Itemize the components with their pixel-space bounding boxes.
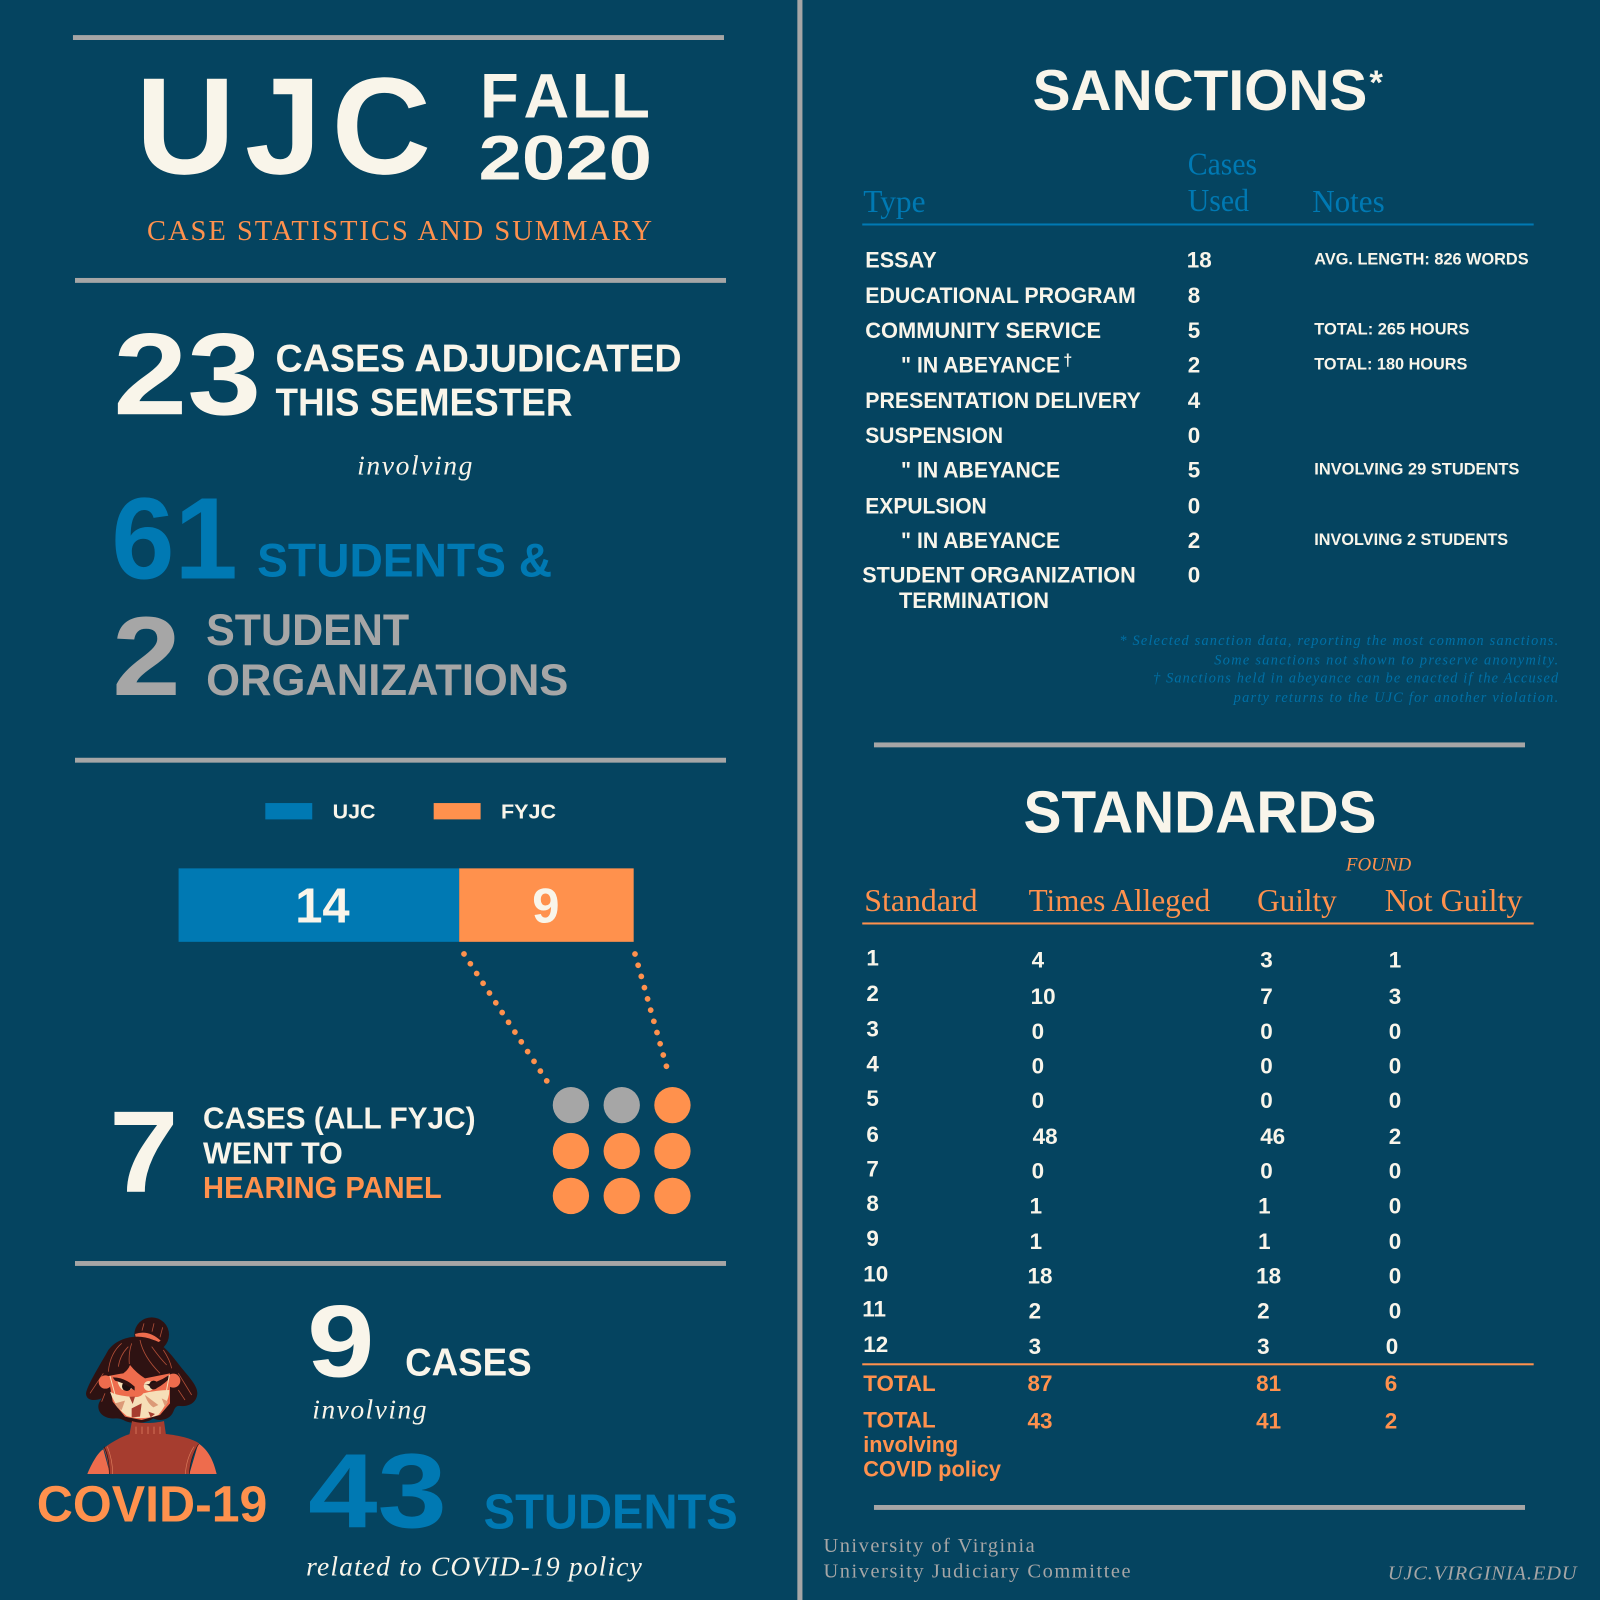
- stat: 23 cases adjudicated: THIS SEMESTER: [276, 381, 572, 424]
- standards totals: TOTAL: [863, 1408, 936, 1433]
- stat: 7 cases hearing panel: CASES (ALL FYJC): [203, 1102, 476, 1136]
- stat: 2 student organizations: 2: [112, 593, 181, 719]
- icon: masked woman: [86, 1317, 217, 1474]
- stat: 9 cases: CASES: [405, 1342, 532, 1385]
- standards table rows: 0: [1389, 1053, 1401, 1078]
- stat: 61 students: 61: [111, 474, 238, 604]
- standards table rows: 48: [1033, 1124, 1058, 1149]
- sanctions table rows: TOTAL: 265 HOURS: [1314, 320, 1469, 339]
- stat: 23 cases adjudicated: CASES ADJUDICATED: [276, 337, 682, 380]
- stacked bar chart: 9: [532, 879, 560, 933]
- stat: 43 students: [308, 1433, 738, 1551]
- standards table rows: 12: [863, 1332, 888, 1357]
- label: COVID-19: COVID-19: [37, 1475, 267, 1532]
- standards table rows: 0: [1032, 1053, 1044, 1078]
- footer: [823, 1535, 1578, 1585]
- standards table rows: 0: [1389, 1229, 1401, 1254]
- dotted connector lines: [464, 954, 666, 1081]
- stat: 9 cases: [307, 1285, 532, 1399]
- sanctions table rows: EDUCATIONAL PROGRAM: [865, 283, 1136, 308]
- standards table rows: 3: [1257, 1334, 1270, 1359]
- standards table rows: 2: [1257, 1298, 1270, 1323]
- standards table rows: 0: [1260, 1053, 1273, 1078]
- stat: 43 students: 43: [308, 1433, 447, 1551]
- footnotes: party returns to the UJC for another violation.: [1233, 690, 1558, 706]
- standards table rows: 18: [1028, 1264, 1053, 1289]
- title: UJC Fall 2020: 2020: [479, 124, 652, 194]
- sanctions table rows: ESSAY: [865, 247, 937, 272]
- text: related to covid policy: related to COVID-19 policy: [306, 1551, 643, 1582]
- sanctions table rows: [862, 247, 1529, 613]
- standards table rows: 0: [1260, 1019, 1273, 1044]
- sanctions table rows: †: [1063, 351, 1072, 369]
- sanctions table rows: " IN ABEYANCE: [901, 352, 1060, 377]
- sanctions table header: Notes: [1312, 184, 1385, 219]
- standards totals: COVID policy: [863, 1457, 1002, 1482]
- standards table header: Standard: [864, 883, 978, 918]
- sanctions table rows: 0: [1188, 563, 1200, 588]
- sanctions table rows: INVOLVING 2 STUDENTS: [1314, 530, 1508, 549]
- standards table rows: 0: [1389, 1193, 1401, 1218]
- stacked bar chart: 14: [295, 879, 350, 933]
- footer: University Judiciary Committee: [823, 1561, 1131, 1583]
- standards table rows: 7: [866, 1157, 879, 1182]
- footnotes: Some sanctions not shown to preserve anonymity.: [1214, 652, 1558, 668]
- stat: 23 cases adjudicated: 23: [113, 309, 261, 439]
- sanctions table rows: TOTAL: 180 HOURS: [1314, 354, 1467, 373]
- stat: 2 student organizations: ORGANIZATIONS: [206, 654, 568, 705]
- sanctions table rows: SUSPENSION: [865, 423, 1003, 448]
- standards table rows: 0: [1032, 1088, 1044, 1113]
- sanctions table rows: 0: [1188, 423, 1200, 448]
- sanctions table rows: " IN ABEYANCE: [901, 458, 1060, 483]
- standards table rows: 3: [1029, 1334, 1041, 1359]
- stat: 7 cases hearing panel: [109, 1087, 476, 1217]
- legend: FYJC: [501, 801, 556, 823]
- standards table header: Times Alleged: [1029, 883, 1210, 918]
- sanctions table rows: 0: [1188, 493, 1200, 518]
- standards table rows: 7: [1260, 984, 1273, 1009]
- sanctions table rows: 8: [1188, 283, 1200, 308]
- sanctions table header: Used: [1188, 183, 1249, 218]
- standards table header: Guilty: [1257, 883, 1337, 918]
- standards table rows: 3: [866, 1017, 879, 1042]
- standards table rows: 0: [1389, 1159, 1401, 1184]
- stat: 7 cases hearing panel: 7: [109, 1087, 179, 1217]
- standards table rows: 1: [1389, 947, 1401, 972]
- standards table rows: 9: [866, 1226, 879, 1251]
- sanctions table rows: 5: [1188, 458, 1200, 483]
- sanctions table rows: 5: [1188, 318, 1200, 343]
- standards table rows: 0: [1032, 1159, 1044, 1184]
- footer: UJC.VIRGINIA.EDU: [1388, 1563, 1578, 1585]
- title: UJC Fall 2020: UJC: [136, 49, 431, 203]
- standards table rows: 1: [1030, 1229, 1042, 1254]
- standards table rows: 0: [1386, 1334, 1398, 1359]
- stat: 61 students: STUDENTS &: [257, 535, 552, 587]
- standards totals: TOTAL: [863, 1371, 936, 1396]
- standards table rows: 0: [1032, 1019, 1044, 1044]
- sanctions table rows: AVG. LENGTH: 826 WORDS: [1314, 249, 1529, 268]
- sanctions table header: Type: [863, 184, 926, 219]
- standards table rows: 1: [1258, 1193, 1271, 1218]
- standards totals: [862, 1363, 1534, 1482]
- standards table rows: 2: [866, 981, 879, 1006]
- standards totals: 43: [1028, 1409, 1053, 1434]
- sanctions table rows: TERMINATION: [899, 588, 1049, 613]
- standards table rows: 10: [863, 1262, 888, 1287]
- standards table rows: 1: [1030, 1193, 1042, 1218]
- standards table rows: 18: [1256, 1264, 1281, 1289]
- stat: 61 students: [111, 474, 552, 604]
- standards table rows: 3: [1389, 984, 1401, 1009]
- standards table rows: 1: [1258, 1229, 1271, 1254]
- standards totals: 81: [1256, 1371, 1281, 1396]
- text: involving: involving: [312, 1393, 427, 1424]
- standards table rows: 8: [866, 1191, 879, 1216]
- standards table rows: 11: [862, 1296, 886, 1321]
- standards table rows: 46: [1260, 1124, 1285, 1149]
- standards table rows: 0: [1389, 1088, 1401, 1113]
- heading: standards: STANDARDS: [1023, 779, 1377, 846]
- standards totals: involving: [863, 1432, 958, 1457]
- stat: 43 students: STUDENTS: [484, 1486, 738, 1540]
- standards table rows: 2: [1029, 1298, 1041, 1323]
- heading: sanctions: SANCTIONS: [1033, 59, 1367, 123]
- standards table rows: 3: [1260, 947, 1273, 972]
- sanctions table rows: 4: [1188, 388, 1201, 413]
- text: involving: involving: [357, 449, 472, 480]
- sanctions table rows: COMMUNITY SERVICE: [865, 318, 1101, 343]
- standards table rows: 0: [1260, 1159, 1273, 1184]
- standards table header: [862, 854, 1534, 924]
- standards table rows: 1: [866, 945, 879, 970]
- standards table rows: 0: [1389, 1264, 1401, 1289]
- sanctions table rows: INVOLVING 29 STUDENTS: [1314, 459, 1519, 478]
- standards totals: 6: [1385, 1371, 1397, 1396]
- stat: 7 cases hearing panel: HEARING PANEL: [203, 1171, 442, 1205]
- title: UJC Fall 2020: [136, 49, 652, 203]
- standards table rows: 6: [866, 1122, 879, 1147]
- standards totals: 87: [1028, 1371, 1053, 1396]
- sanctions table header: [862, 146, 1534, 226]
- sanctions table rows: PRESENTATION DELIVERY: [865, 388, 1141, 413]
- stat: 2 student organizations: STUDENT: [206, 604, 409, 655]
- stat: 7 cases hearing panel: WENT TO: [203, 1136, 343, 1170]
- standards table rows: 0: [1260, 1088, 1273, 1113]
- sanctions table rows: 2: [1188, 352, 1200, 377]
- stat: 2 student organizations: [112, 593, 568, 719]
- sanctions table rows: EXPULSION: [865, 493, 987, 518]
- standards totals: 2: [1385, 1409, 1397, 1434]
- standards table rows: 0: [1389, 1298, 1401, 1323]
- standards totals: 41: [1256, 1409, 1281, 1434]
- standards table rows: 4: [866, 1051, 879, 1076]
- standards table header: Not Guilty: [1385, 883, 1523, 918]
- dot grid: [553, 1087, 691, 1214]
- footnotes: * Selected sanction data, reporting the most common sanctions.: [1119, 633, 1558, 649]
- standards table rows: 5: [866, 1086, 879, 1111]
- stacked bar chart: [179, 868, 634, 942]
- standards table rows: 2: [1389, 1124, 1401, 1149]
- footnotes: † Sanctions held in abeyance can be enacted if the Accused: [1153, 671, 1559, 687]
- sanctions table rows: 18: [1187, 247, 1212, 272]
- sanctions table rows: STUDENT ORGANIZATION: [862, 563, 1136, 588]
- legend: UJC: [333, 801, 376, 823]
- standards table rows: 4: [1032, 947, 1045, 972]
- stat: 23 cases adjudicated: [113, 309, 682, 439]
- title: UJC Fall 2020: FALL: [480, 61, 650, 131]
- standards table rows: [862, 945, 1401, 1359]
- footnotes: [1119, 633, 1559, 706]
- sanctions table rows: " IN ABEYANCE: [901, 528, 1060, 553]
- standards table rows: 10: [1031, 984, 1056, 1009]
- stat: 9 cases: 9: [307, 1285, 374, 1399]
- subtitle: CASE STATISTICS AND SUMMARY: [147, 216, 654, 247]
- footer: University of Virginia: [823, 1535, 1035, 1557]
- standards table rows: 0: [1389, 1019, 1401, 1044]
- standards table header: FOUND: [1345, 854, 1411, 875]
- heading: sanctions: *: [1369, 64, 1383, 102]
- legend: [265, 801, 556, 823]
- sanctions table header: Cases: [1188, 146, 1257, 181]
- sanctions table rows: 2: [1188, 528, 1200, 553]
